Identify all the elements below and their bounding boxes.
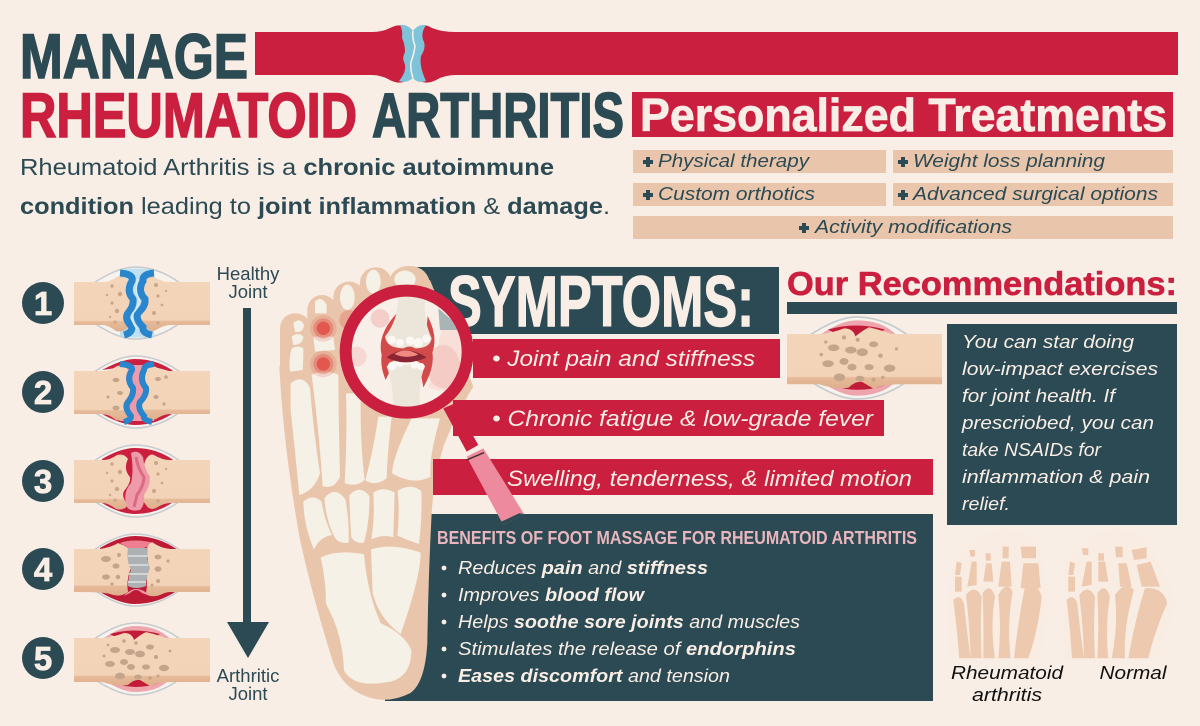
bar: chronic fatigue bbox=[453, 400, 884, 436]
label: Arthritic Joint: Joint bbox=[228, 683, 268, 704]
badge 1 bbox=[22, 282, 64, 324]
heading: Our Recommendations: Our Recommendations: bbox=[787, 265, 1177, 302]
badge 4 bbox=[22, 548, 64, 590]
caption: rheumatoid arthritis: arthritis bbox=[972, 685, 1042, 705]
panel: benefits of foot massage: Reduces pain and stiffness bbox=[458, 558, 708, 578]
foot x-ray: rheumatoid arthritis bbox=[949, 530, 1047, 660]
panel: recommendation text: for joint health. If bbox=[962, 386, 1117, 406]
bar: joint pain and stiffness: • Joint pain and stiffness bbox=[492, 346, 755, 371]
panel: benefits of foot massage: Improves blood flow bbox=[458, 585, 645, 605]
intro text: Rheumatoid Arthritis is a chronic autoimmune bbox=[20, 154, 554, 180]
label: Healthy Joint: Joint bbox=[228, 281, 268, 302]
header bone graphic bbox=[255, 25, 1178, 83]
panel: recommendation text: relief. bbox=[962, 494, 1010, 514]
panel: benefits of foot massage: Helps soothe sore joints and muscles bbox=[458, 612, 800, 632]
treatments list: Activity modifications bbox=[814, 217, 1012, 237]
magnifier lens with inflamed joint bbox=[345, 290, 468, 413]
bar: swelling bbox=[433, 459, 933, 495]
panel: benefits of foot massage: Eases discomfort and tension bbox=[458, 666, 730, 686]
treatments list: Physical therapy bbox=[658, 151, 810, 171]
treatments list: Weight loss planning bbox=[913, 151, 1105, 171]
title line: RHEUMATOID ARTHRITIS: ARTHRITIS bbox=[372, 81, 624, 151]
intro text bbox=[20, 154, 610, 219]
badge 5 bbox=[22, 637, 64, 679]
panel: recommendation text: take NSAIDs for bbox=[962, 440, 1102, 460]
panel: benefits of foot massage bbox=[385, 514, 933, 701]
bar: swelling: Swelling, tenderness, & limited motion bbox=[507, 466, 912, 491]
badge 1: 1 bbox=[34, 285, 52, 322]
foot x-ray: normal bbox=[1064, 530, 1175, 660]
badge 2: 2 bbox=[34, 374, 52, 411]
badge 5: 5 bbox=[34, 640, 52, 677]
joint stage 5 bbox=[74, 623, 210, 695]
treatments list: Advanced surgical options bbox=[912, 184, 1158, 204]
heading: Personalized Treatments: Personalized Treatments bbox=[640, 89, 1167, 141]
panel: symptoms heading: SYMPTOMS: bbox=[448, 263, 754, 342]
panel: benefits of foot massage: Stimulates the release of endorphins bbox=[458, 639, 796, 659]
panel: recommendation text bbox=[947, 324, 1177, 525]
panel: benefits of foot massage: BENEFITS OF FOOT MASSAGE FOR RHEUMATOID ARTHRITIS bbox=[437, 528, 917, 548]
badge 3 bbox=[22, 460, 64, 502]
magnifier handle bbox=[443, 403, 524, 525]
title line: MANAGE: MANAGE bbox=[20, 22, 248, 92]
treatments list: Custom orthotics bbox=[658, 184, 815, 204]
arrow: progression bbox=[227, 308, 269, 658]
bar: chronic fatigue: • Chronic fatigue & low-grade fever bbox=[492, 406, 875, 431]
badge 3: 3 bbox=[34, 463, 52, 500]
joint stage 1: healthy bbox=[74, 267, 210, 339]
joint stage 3 bbox=[74, 445, 210, 517]
treatments list bbox=[633, 150, 1173, 239]
bar: joint pain and stiffness bbox=[473, 339, 780, 378]
caption: normal: Normal bbox=[1100, 663, 1168, 683]
badge 4: 4 bbox=[34, 551, 53, 588]
label: Healthy Joint: Healthy bbox=[217, 263, 280, 284]
recommendation joint illustration bbox=[787, 317, 942, 399]
panel: recommendation text: inflammation & pain bbox=[962, 467, 1150, 487]
panel: recommendation text: You can star doing bbox=[962, 332, 1134, 352]
title line: RHEUMATOID ARTHRITIS bbox=[20, 81, 624, 151]
title line: RHEUMATOID ARTHRITIS: RHEUMATOID bbox=[20, 81, 357, 151]
badge 2 bbox=[22, 371, 64, 413]
foot illustration bbox=[279, 266, 473, 700]
label: Arthritic Joint: Arthritic bbox=[217, 665, 279, 686]
caption: rheumatoid arthritis: Rheumatoid bbox=[951, 663, 1064, 683]
panel: recommendation text: low-impact exercises bbox=[962, 359, 1158, 379]
joint stage 4 bbox=[74, 534, 210, 606]
panel: recommendation text: prescriobed, you can bbox=[961, 413, 1154, 433]
joint stage 2 bbox=[74, 356, 210, 428]
intro text: condition leading to joint inflammation & damage . bbox=[20, 193, 610, 219]
